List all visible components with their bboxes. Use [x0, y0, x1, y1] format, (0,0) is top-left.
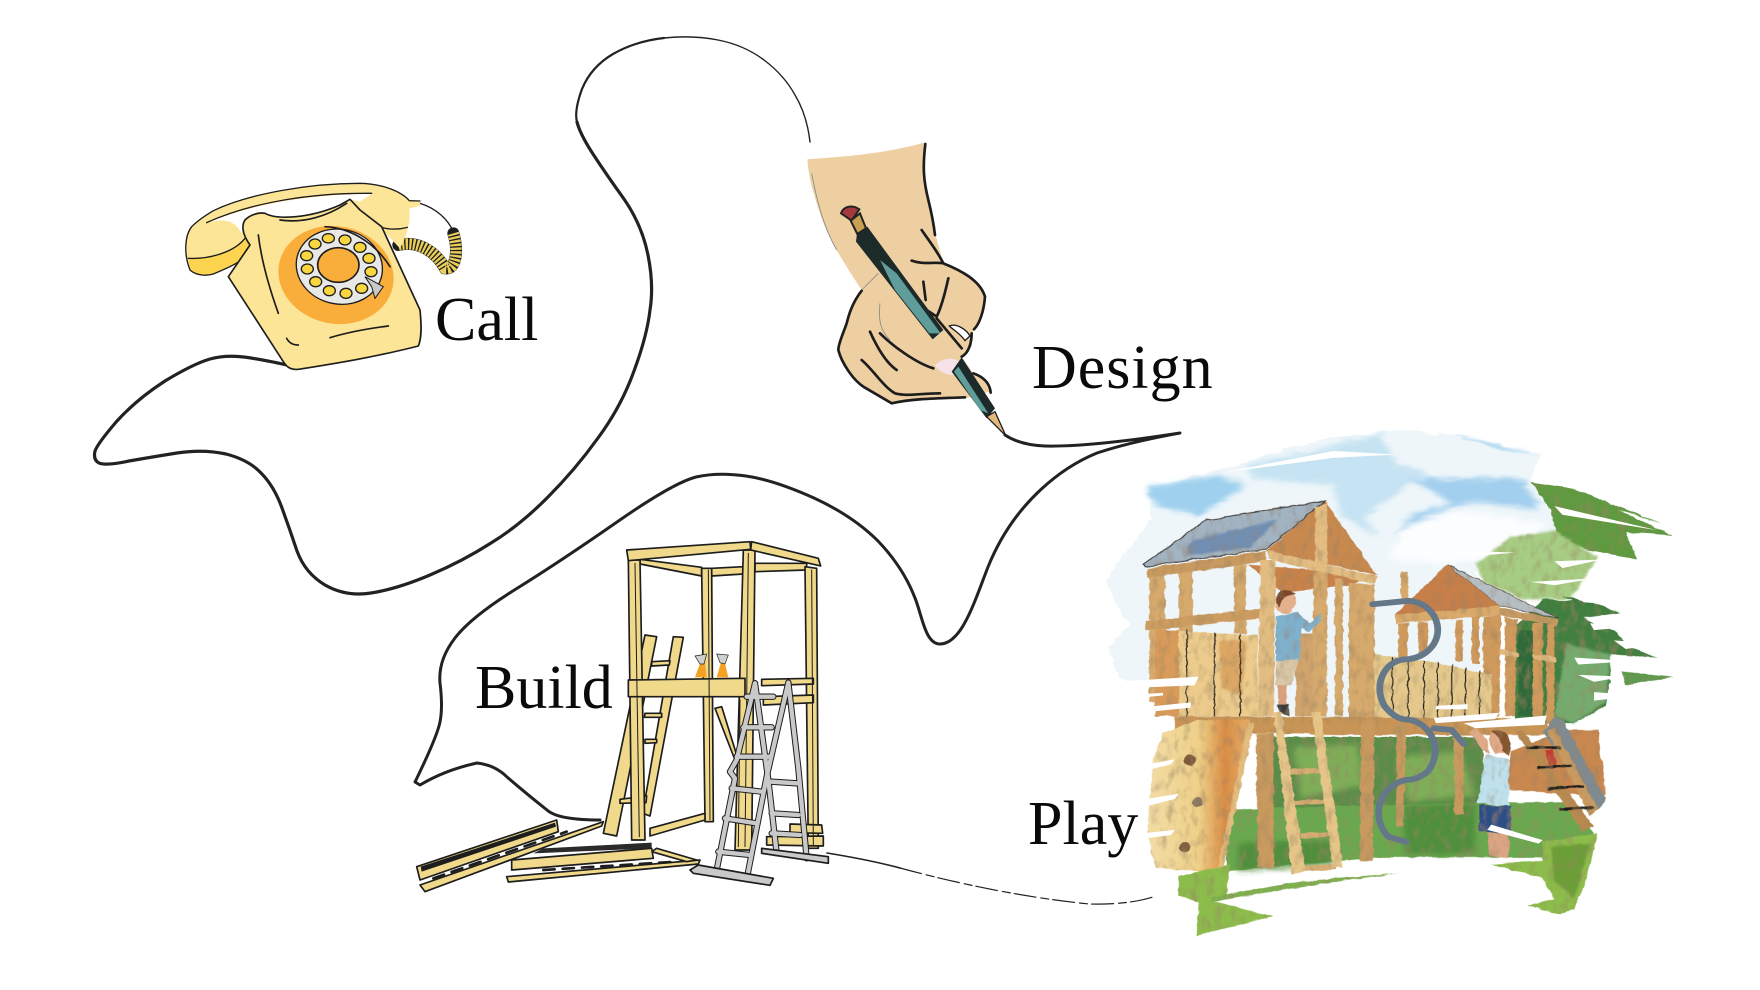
icon: wooden play frame under construction	[417, 542, 828, 892]
painted scene layers	[1143, 482, 1673, 936]
bottom grass strokes	[1179, 833, 1598, 936]
icon: hand drawing with pencil	[807, 143, 1006, 436]
journey line: from the frame to the play scene	[827, 853, 1156, 904]
front tower background and roof	[1143, 501, 1377, 716]
foliage behind the towers	[1475, 482, 1673, 723]
front tower wall panel	[1155, 561, 1276, 716]
coiled cord	[398, 203, 456, 268]
aluminium stepladder	[690, 683, 828, 885]
label: Call: Call	[435, 286, 538, 354]
dial	[269, 215, 403, 335]
pencil	[841, 206, 1006, 436]
handle opening	[208, 194, 372, 233]
stacked timber panels	[417, 820, 700, 892]
deck, posts and ladder	[1175, 713, 1547, 875]
fingernails	[935, 325, 970, 375]
climbing wall	[1147, 720, 1254, 873]
right-hand deck, ladder and slide	[1507, 716, 1606, 832]
sky wash	[1108, 430, 1566, 730]
journey line: from the pencil to the frame	[415, 433, 1180, 820]
bushes and lawn	[1226, 737, 1594, 871]
rear tower	[1375, 565, 1558, 723]
hand and arm	[807, 143, 990, 403]
curly tube slide	[1373, 601, 1464, 842]
label: Build: Build	[475, 654, 613, 722]
child on the platform	[1276, 590, 1321, 716]
white brush streaks	[1116, 451, 1661, 844]
phone body	[228, 199, 421, 369]
child reaching up	[1469, 728, 1511, 858]
handset	[186, 183, 420, 275]
body details	[258, 203, 390, 345]
front tower posts and beams	[1145, 503, 1408, 720]
hand outlines	[838, 144, 991, 403]
timber frame	[603, 542, 823, 850]
journey line: from the phone to the pencil	[94, 37, 810, 594]
hammers	[695, 654, 728, 677]
label: Play: Play	[1028, 790, 1138, 858]
label: Design: Design	[1032, 334, 1214, 402]
icon: rotary telephone	[186, 183, 456, 369]
illustration: watercolour playground scene	[1108, 430, 1673, 936]
